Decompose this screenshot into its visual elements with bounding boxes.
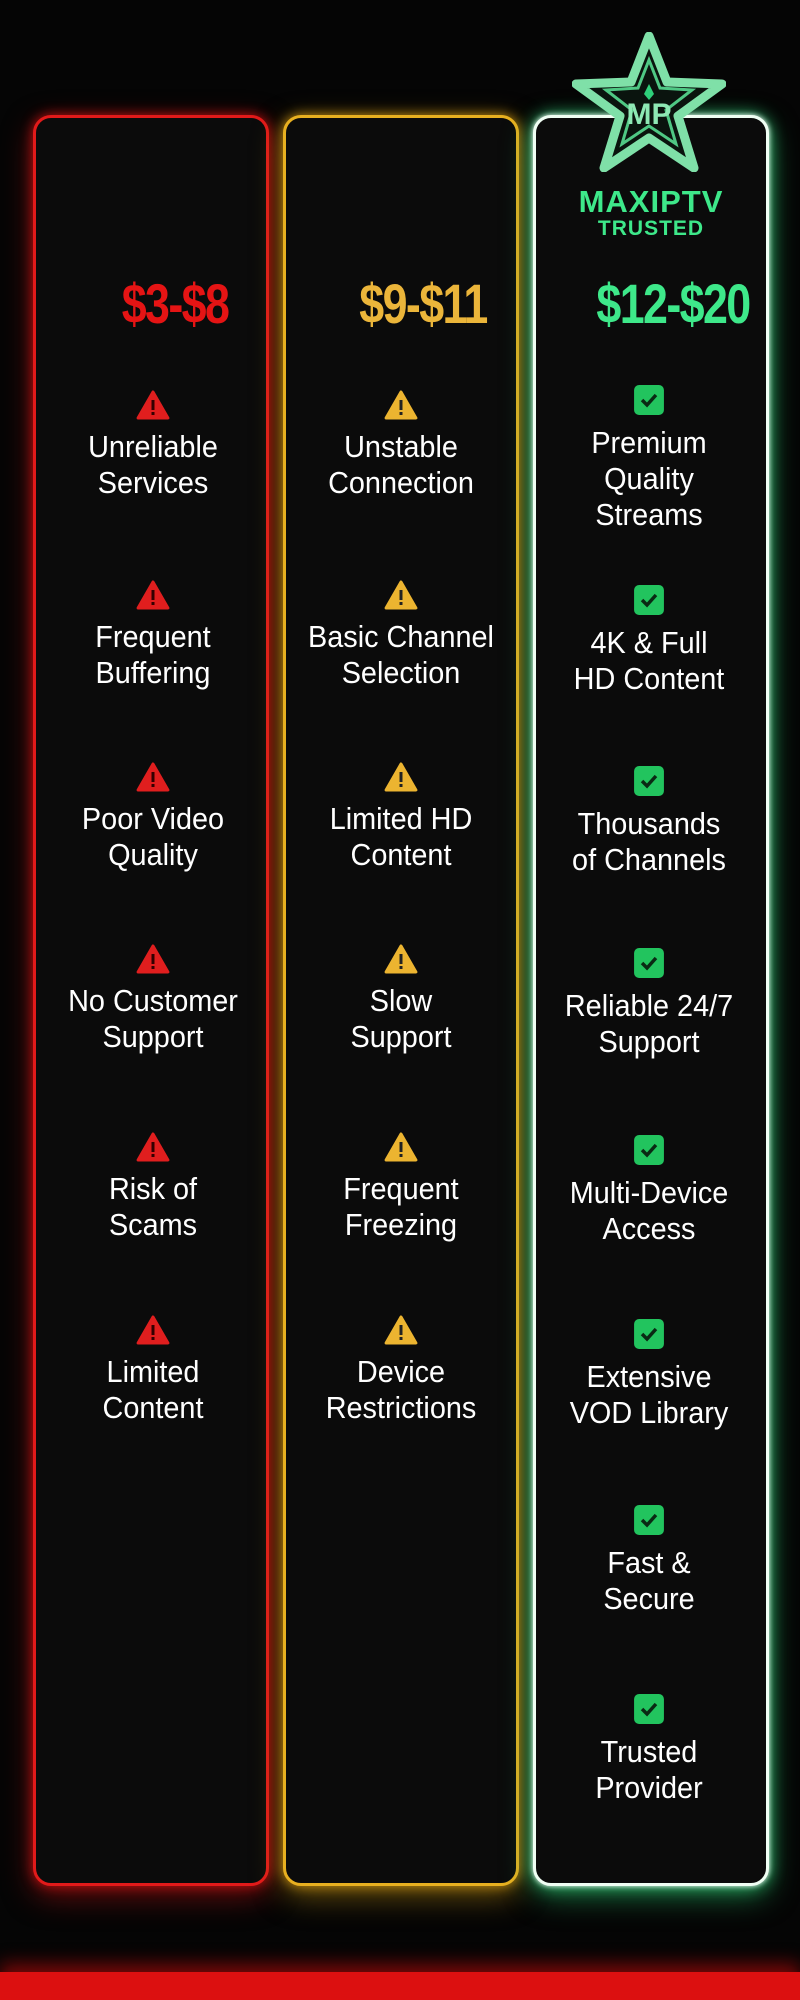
green items <box>565 385 733 1805</box>
item <box>68 944 238 1054</box>
item: 4K & Full <box>591 625 707 660</box>
item <box>88 390 218 500</box>
item: Support <box>351 1019 451 1054</box>
item: Limited HD <box>330 801 472 836</box>
item: Multi-Device <box>570 1175 728 1210</box>
item: Freezing <box>345 1207 457 1242</box>
price: green: $12-$20 <box>596 272 750 335</box>
item <box>595 1694 703 1805</box>
item <box>603 1505 695 1616</box>
logo text <box>579 184 723 240</box>
item: Quality <box>108 837 198 872</box>
item <box>330 762 472 872</box>
item: Fast & <box>607 1545 691 1580</box>
item <box>109 1132 198 1242</box>
item: Provider <box>595 1770 703 1805</box>
item <box>570 1135 728 1246</box>
item <box>574 585 724 696</box>
item: Frequent <box>95 619 211 654</box>
item: Device <box>357 1354 445 1389</box>
item: Content <box>103 1390 203 1425</box>
item: No Customer <box>68 983 238 1018</box>
item <box>565 948 733 1059</box>
item: Content <box>351 837 451 872</box>
item <box>328 390 474 500</box>
item <box>570 1319 728 1430</box>
item: Unstable <box>344 429 458 464</box>
item: Restrictions <box>326 1390 476 1425</box>
item: Slow <box>370 983 432 1018</box>
item: Services <box>98 465 208 500</box>
item: Scams <box>109 1207 197 1242</box>
logo: star: MP <box>626 98 672 131</box>
panel: mid <box>283 115 519 1886</box>
logo text: TRUSTED <box>598 217 704 240</box>
item: Limited <box>107 1354 199 1389</box>
panel: maxiptv <box>533 115 769 1886</box>
item: Support <box>103 1019 203 1054</box>
item: Thousands <box>578 806 720 841</box>
item <box>82 762 224 872</box>
item: Connection <box>328 465 474 500</box>
item <box>572 766 726 877</box>
yellow items <box>308 390 494 1425</box>
item <box>343 1132 459 1242</box>
item: Buffering <box>96 655 210 690</box>
item: Premium <box>591 425 707 460</box>
item <box>103 1315 204 1425</box>
item: Risk of <box>109 1171 197 1206</box>
item: VOD Library <box>570 1395 728 1430</box>
panel: budget <box>33 115 269 1886</box>
item <box>591 385 707 532</box>
item: Secure <box>603 1581 695 1616</box>
price: red: $3-$8 <box>122 272 228 335</box>
red items <box>68 390 238 1425</box>
bottom red bar <box>0 1972 800 2000</box>
item: Reliable 24/7 <box>565 988 733 1023</box>
item: Poor Video <box>82 801 224 836</box>
logo: star <box>572 32 726 172</box>
logo text: MAXIPTV <box>579 184 723 219</box>
item: Support <box>599 1024 699 1059</box>
item: Quality <box>604 461 694 496</box>
item: Streams <box>595 497 703 532</box>
item <box>326 1315 476 1425</box>
item: Access <box>603 1211 695 1246</box>
item <box>95 580 211 690</box>
item: Basic Channel <box>308 619 494 654</box>
item: Trusted <box>601 1734 697 1769</box>
item: Extensive <box>587 1359 711 1394</box>
item <box>308 580 494 690</box>
item: Unreliable <box>88 429 218 464</box>
price: yellow: $9-$11 <box>359 272 487 335</box>
item: of Channels <box>572 842 726 877</box>
item: Frequent <box>343 1171 459 1206</box>
item <box>351 944 452 1054</box>
item: Selection <box>342 655 460 690</box>
item: HD Content <box>574 661 724 696</box>
